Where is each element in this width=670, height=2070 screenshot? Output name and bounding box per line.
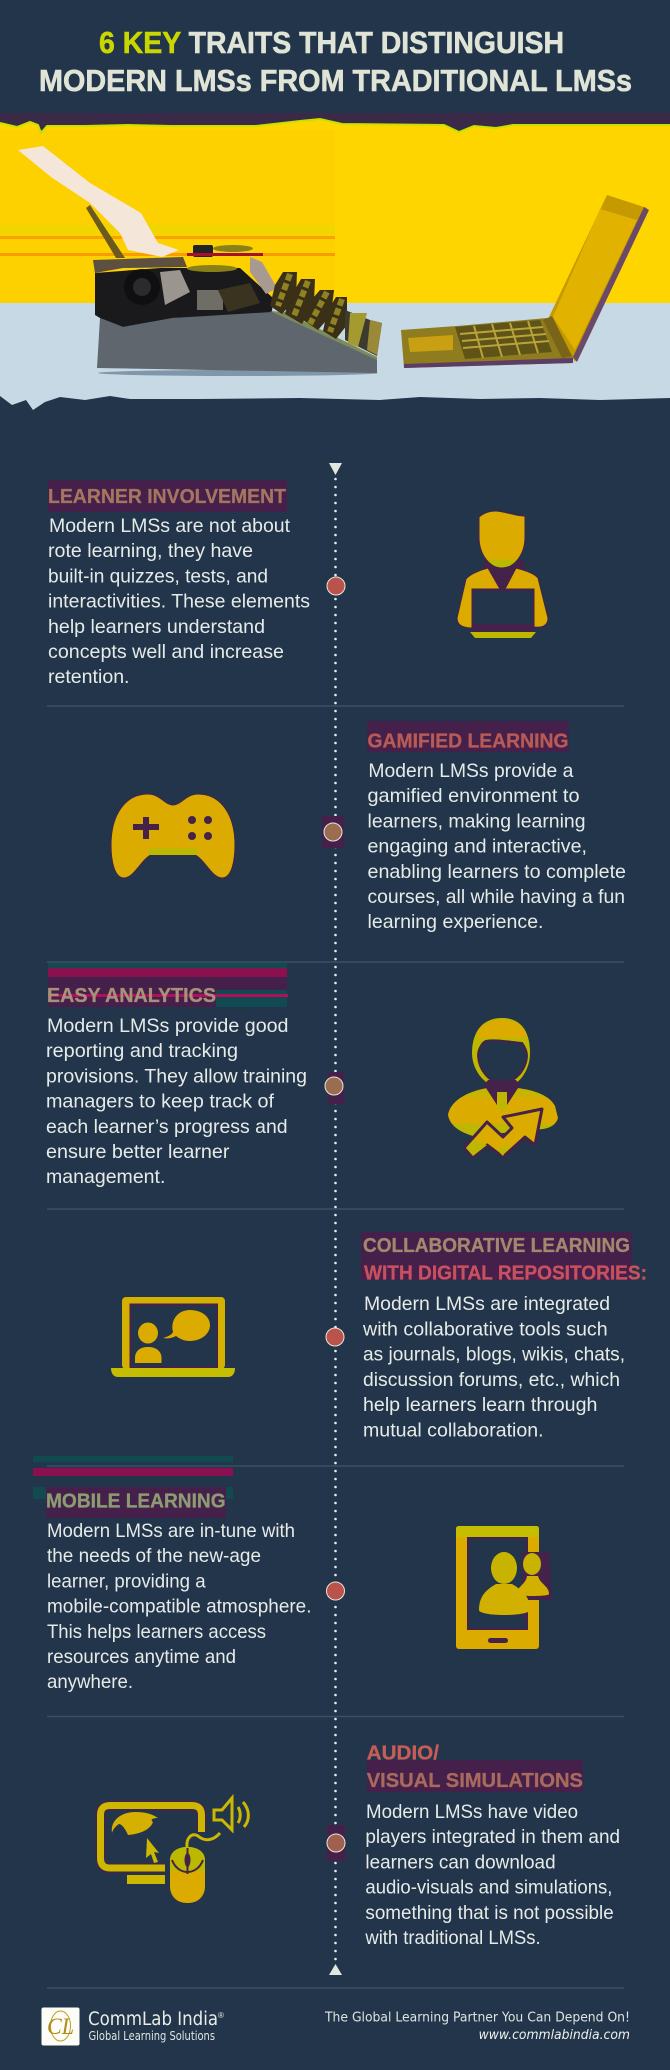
body text: mobile learning: This helps learners access [47, 1621, 266, 1643]
typewriter [86, 205, 382, 376]
brand name: Global Learning Solutions [88, 2028, 215, 2043]
body text: gamified learning: engaging and interactive, [368, 836, 587, 858]
tagline and website: The Global Learning Partner You Can Depend On! [324, 2010, 630, 2026]
body text: learner involvement: built-in quizzes, tests, and [48, 565, 268, 587]
marker 1 [327, 577, 345, 595]
brand name [88, 2009, 224, 2043]
body text: audio visual simulations: something that is not possible [365, 1902, 614, 1924]
body text: audio visual simulations: with traditional LMSs. [364, 1927, 541, 1949]
body text: gamified learning: learning experience. [368, 911, 544, 933]
body text: audio visual simulations: Modern LMSs have video [366, 1801, 578, 1823]
body text: gamified learning [368, 760, 626, 933]
panel: audio visual simulations [100, 1742, 620, 1949]
marker 4 [326, 1328, 344, 1346]
body text: collaborative learning: help learners learn through [363, 1394, 597, 1416]
body text: collaborative learning: Modern LMSs are integrated [364, 1293, 610, 1315]
mechanism [95, 268, 273, 327]
logo: CommLab India: CL [47, 2014, 74, 2039]
body text: collaborative learning: as journals, blogs, wikis, chats, [363, 1344, 625, 1366]
marker 6 [327, 1825, 345, 1861]
body text: mobile learning [47, 1520, 312, 1693]
timeline: dotted line with end arrows [329, 463, 342, 1975]
body text: gamified learning: courses, all while having a fun [368, 886, 625, 908]
body text: learner involvement: interactivities. These elements [48, 591, 310, 613]
body text: easy analytics: reporting and tracking [46, 1040, 238, 1062]
panel: learner involvement [48, 480, 548, 688]
shadow under typewriter [98, 370, 378, 376]
body text: collaborative learning: discussion forums, etc., which [363, 1369, 620, 1391]
body text: learner involvement: rote learning, they have [48, 540, 253, 562]
panel: mobile learning [33, 1456, 552, 1693]
icon: tablet with people [456, 1526, 552, 1649]
body text: easy analytics: management. [46, 1166, 165, 1188]
body text: learner involvement: Modern LMSs are not about [49, 515, 291, 537]
body text: audio visual simulations: audio-visuals and simulations, [365, 1877, 612, 1899]
body text: gamified learning: gamified environment to [368, 785, 580, 807]
body text: collaborative learning: with collaborative tools such [362, 1318, 608, 1340]
body text: gamified learning: enabling learners to complete [368, 861, 626, 883]
title [39, 25, 632, 98]
heading: learner involvement: LEARNER INVOLVEMENT [48, 485, 286, 508]
heading: learner involvement [48, 480, 287, 512]
body text: mobile learning: resources anytime and [47, 1646, 236, 1668]
heading: collaborative learning with digital repositories: COLLABORATIVE LEARNING [363, 1234, 630, 1257]
marker 5 [326, 1582, 344, 1600]
body text: collaborative learning [362, 1293, 625, 1442]
body text: collaborative learning: mutual collaboration. [363, 1420, 544, 1442]
icon: manager with growth arrow [448, 1018, 558, 1157]
heading: audio visual simulations: VISUAL SIMULATIONS [367, 1769, 583, 1792]
body text: audio visual simulations: players integrated in them and [365, 1826, 620, 1848]
laptop [401, 195, 649, 368]
body text: easy analytics: Modern LMSs provide good [47, 1015, 288, 1037]
typewriter keys [270, 272, 347, 339]
typewriter paper [18, 146, 179, 257]
marker 3 [325, 1072, 344, 1104]
body text: learner involvement [48, 515, 310, 688]
body text: easy analytics: managers to keep track of [46, 1091, 275, 1113]
title: 6 KEY TRAITS THAT DISTINGUISH [99, 25, 564, 60]
body text: learner involvement: help learners understand [48, 616, 265, 638]
typewriter body [97, 311, 377, 373]
body text: easy analytics: ensure better learner [46, 1141, 230, 1163]
heading: easy analytics [47, 963, 288, 1007]
body text: mobile learning: anywhere. [47, 1671, 133, 1693]
heading: easy analytics: EASY ANALYTICS [47, 984, 216, 1007]
heading: audio visual simulations [367, 1742, 583, 1792]
body text: audio visual simulations: learners can download [365, 1851, 556, 1873]
tagline and website: www.commlabindia.com [479, 2028, 630, 2043]
section dividers [47, 706, 624, 1988]
panel: gamified learning [111, 721, 626, 933]
icon: person with laptop [457, 511, 548, 638]
tagline and website [324, 2010, 630, 2043]
body text: learner involvement: concepts well and increase [48, 641, 284, 663]
panel: easy analytics [46, 963, 558, 1188]
body text: mobile learning: Modern LMSs are in-tune with [47, 1520, 295, 1542]
body text: mobile learning: learner, providing a [47, 1570, 206, 1592]
heading: gamified learning [368, 721, 568, 752]
marker 2 [322, 816, 344, 848]
body text: audio visual simulations [364, 1801, 620, 1949]
body text: easy analytics: provisions. They allow training [46, 1065, 307, 1087]
body text: mobile learning: the needs of the new-age [47, 1545, 261, 1567]
brand name: ® [218, 2011, 224, 2020]
heading: gamified learning: GAMIFIED LEARNING [368, 730, 568, 752]
panel: collaborative learning [111, 1232, 647, 1442]
icon: monitor, eye, mouse, speaker [100, 1798, 248, 1903]
body text: gamified learning: learners, making learning [368, 810, 586, 832]
hero photo: typewriter and laptop [0, 113, 670, 410]
icon: game controller [111, 794, 235, 878]
icon: laptop with chat [111, 1297, 235, 1377]
heading: audio visual simulations: AUDIO/ [367, 1742, 439, 1765]
body text: mobile learning: mobile-compatible atmosphere. [47, 1596, 312, 1618]
heading: collaborative learning with digital repositories: WITH DIGITAL REPOSITORIES: [364, 1262, 647, 1284]
heading: collaborative learning with digital repositories [361, 1232, 647, 1284]
heading: mobile learning [33, 1456, 233, 1518]
body text: learner involvement: retention. [48, 666, 130, 688]
body text: easy analytics [46, 1015, 307, 1188]
body text: easy analytics: each learner’s progress and [46, 1116, 288, 1138]
logo: CommLab India [42, 2008, 80, 2046]
body text: gamified learning: Modern LMSs provide a [368, 760, 574, 782]
heading: mobile learning: MOBILE LEARNING [46, 1489, 226, 1512]
brand name: CommLab India [88, 2009, 218, 2030]
title: MODERN LMSs FROM TRADITIONAL LMSs [39, 63, 632, 98]
footer [42, 2008, 630, 2046]
